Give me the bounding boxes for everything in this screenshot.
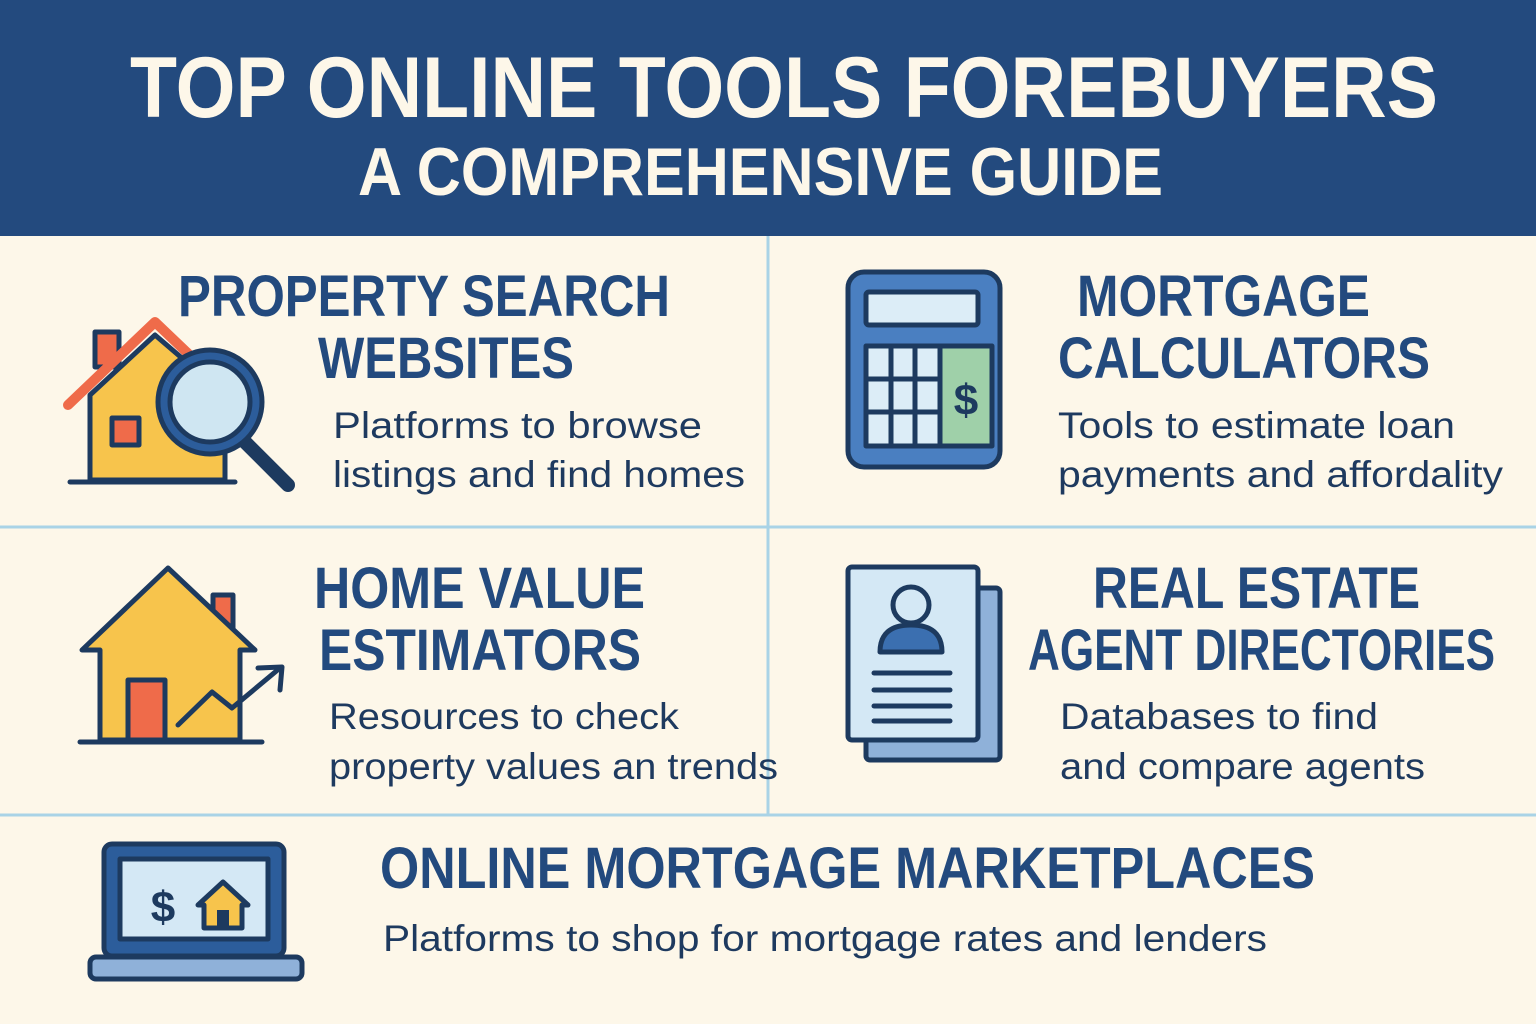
panel: mortgage calculators: $ [954, 376, 978, 425]
description: Platforms to browse [333, 405, 702, 446]
panel: mortgage calculators: payments and affordality [1058, 454, 1504, 495]
panel: home value estimators: ESTIMATORS [319, 618, 641, 683]
description: Databases to find [1060, 696, 1378, 737]
icon: laptop with dollar and house [90, 844, 302, 979]
panel: mortgage calculators: CALCULATORS [1058, 326, 1430, 391]
panel: real estate agent directories: and compare agents [1060, 746, 1425, 787]
heading: MORTGAGE [1077, 264, 1370, 329]
description: Tools to estimate loan [1058, 405, 1455, 446]
description: Resources to check [329, 696, 680, 737]
heading: PROPERTY SEARCH [178, 264, 670, 329]
subtitle: A COMPREHENSIVE GUIDE [358, 134, 1163, 210]
header banner [0, 0, 1536, 236]
icon: calculator [848, 272, 1000, 467]
panel: mortgage calculators [848, 264, 1504, 495]
panel: online mortgage marketplaces: $ [151, 883, 175, 932]
description: Platforms to shop for mortgage rates and lenders [383, 918, 1267, 959]
heading: REAL ESTATE [1093, 556, 1420, 621]
panel: real estate agent directories [848, 556, 1495, 787]
panel: property search websites: listings and find homes [333, 454, 745, 495]
heading: HOME VALUE [314, 556, 645, 621]
panel: property search websites [68, 264, 745, 495]
panel: property search websites: WEBSITES [318, 326, 574, 391]
heading: ONLINE MORTGAGE MARKETPLACES [380, 836, 1315, 901]
panel: online mortgage marketplaces [90, 836, 1315, 979]
panel: home value estimators: property values an trends [329, 746, 778, 787]
icon: house with magnifier [68, 322, 288, 485]
icon: agent profile document [848, 567, 1000, 760]
panel: home value estimators [80, 556, 778, 787]
icon: house with rising arrow [80, 568, 282, 742]
